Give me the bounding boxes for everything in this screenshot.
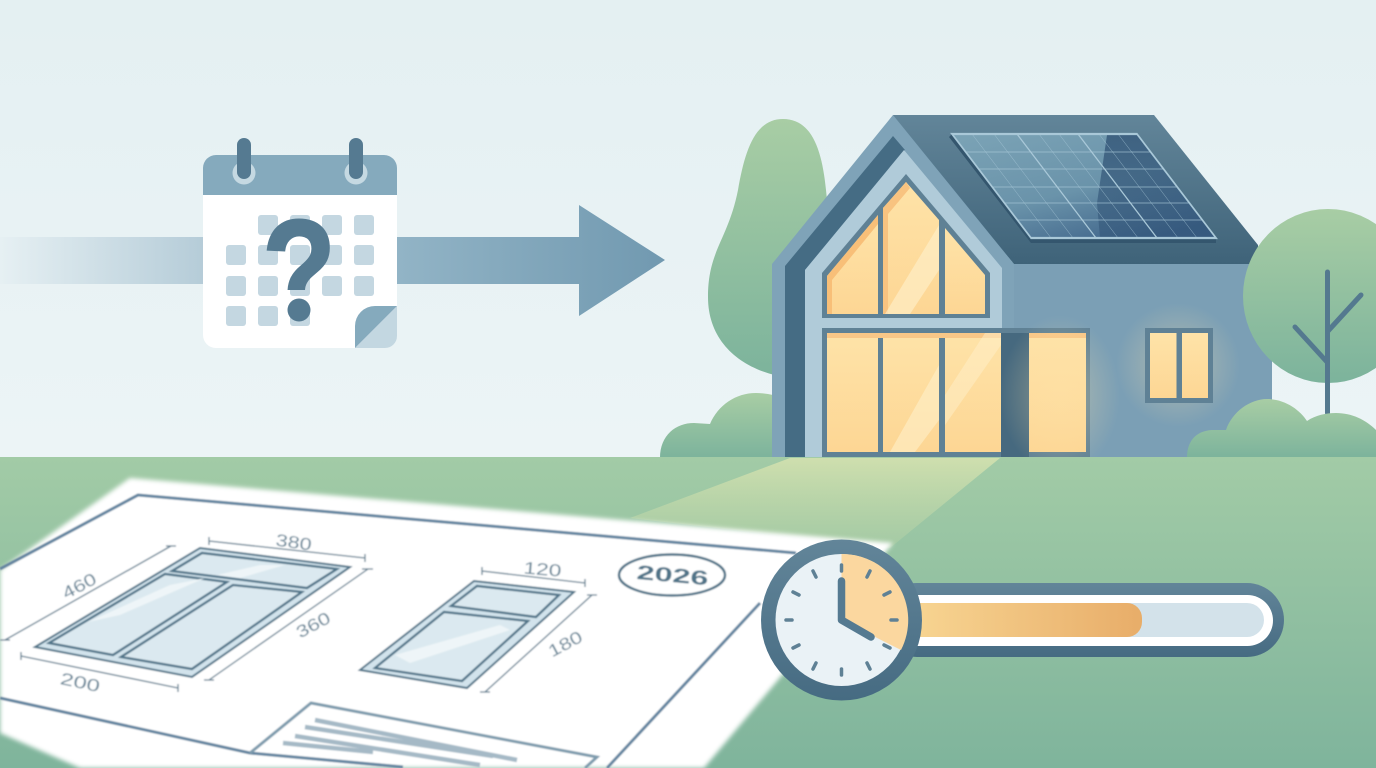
tree trunk and branches bbox=[1295, 272, 1361, 413]
year stamp 2026: 2026 bbox=[636, 562, 709, 590]
bar inner white bbox=[880, 595, 1273, 646]
sheet inner border bbox=[0, 495, 796, 768]
house side wall bbox=[1010, 262, 1272, 458]
clock hands bbox=[842, 581, 871, 637]
icon: clock bbox=[761, 540, 922, 700]
tree: tall left bbox=[708, 119, 831, 378]
bar track bbox=[890, 603, 1264, 637]
door bbox=[1029, 333, 1086, 452]
arrow shaft and head bbox=[397, 205, 665, 316]
year stamp 2026 bbox=[619, 554, 725, 596]
question mark: ? bbox=[262, 191, 336, 351]
sky background bbox=[0, 0, 1376, 458]
wall glow bbox=[1000, 315, 1120, 475]
small window bbox=[1116, 303, 1240, 427]
question mark bbox=[266, 218, 330, 322]
progress bar bbox=[880, 583, 1284, 657]
solar panel bbox=[949, 134, 1216, 243]
bush: left bbox=[660, 393, 790, 458]
dimension lines bbox=[0, 537, 597, 692]
dimension labels: 120 bbox=[523, 558, 562, 581]
dimension labels: 180 bbox=[545, 627, 586, 661]
gable dark band bbox=[785, 136, 905, 458]
calendar header bbox=[203, 155, 397, 195]
lower window bbox=[822, 328, 1090, 458]
upper window bbox=[822, 174, 990, 318]
arrow faded tail bbox=[0, 237, 204, 284]
light path from house bbox=[630, 458, 1000, 548]
front gable bbox=[772, 115, 1014, 458]
arrow bbox=[0, 205, 665, 316]
paper bbox=[0, 478, 893, 768]
house bbox=[772, 115, 1272, 475]
dimension labels bbox=[59, 531, 586, 696]
dimension labels: 360 bbox=[293, 608, 334, 642]
tree: right bbox=[1243, 209, 1376, 383]
blueprint window large bbox=[35, 548, 350, 677]
bush: right bbox=[1187, 399, 1376, 458]
blueprint sheet bbox=[0, 478, 893, 768]
calendar day grid bbox=[226, 215, 374, 326]
dimension labels: 460 bbox=[59, 569, 100, 603]
dimension labels: 380 bbox=[275, 531, 313, 554]
title block bbox=[250, 703, 597, 768]
clock face bbox=[776, 554, 908, 686]
ground bbox=[0, 457, 1376, 768]
dimension labels: 200 bbox=[59, 669, 102, 696]
gable light band bbox=[805, 150, 1002, 458]
elapsed time sector bbox=[842, 554, 908, 650]
clock ticks bbox=[786, 565, 897, 675]
roof bbox=[893, 115, 1258, 264]
blueprint window small bbox=[360, 581, 574, 688]
calendar page fold bbox=[355, 306, 397, 348]
calendar rings bbox=[232, 138, 368, 184]
bar fill bbox=[890, 603, 1142, 637]
icon: calendar bbox=[203, 138, 397, 351]
